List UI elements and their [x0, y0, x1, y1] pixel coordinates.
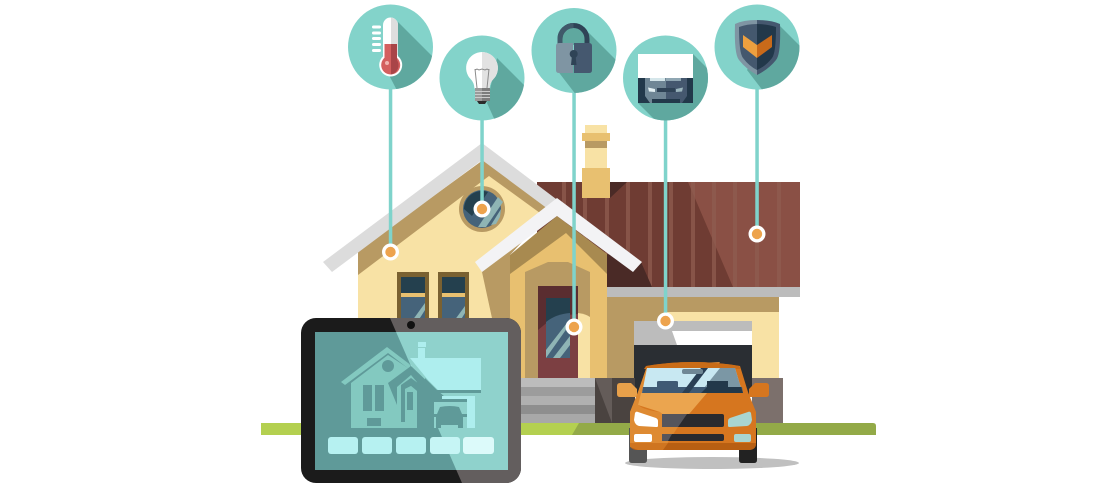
car windshield	[642, 368, 743, 393]
attic round window	[459, 186, 505, 232]
garage wing	[607, 287, 800, 395]
car	[617, 362, 769, 463]
silhouette: porch gable shading	[388, 366, 432, 428]
icon: thermometer	[348, 4, 433, 90]
tablet screen	[315, 332, 508, 470]
connector: thermometer	[382, 85, 399, 260]
foundation and steps	[521, 378, 783, 423]
car wheels	[629, 428, 757, 463]
connector: lock	[566, 88, 582, 336]
car body	[630, 362, 756, 450]
icon: shield	[714, 4, 800, 90]
silhouette: main house left	[341, 347, 417, 428]
car shadow	[625, 457, 799, 469]
ground: grass strip	[261, 423, 876, 435]
silhouette: tablet car	[432, 406, 467, 428]
car grille and lights	[634, 412, 752, 442]
silhouette: shaded side and garage	[422, 378, 445, 428]
tablet buttons	[328, 437, 494, 454]
silhouette: porch fill	[405, 386, 417, 428]
connector: light bulb	[474, 116, 490, 218]
silhouette: main house right	[410, 364, 412, 366]
front windows	[397, 272, 469, 322]
brown main roof	[537, 182, 800, 287]
tablet	[301, 318, 521, 483]
silhouette: windows and door	[363, 385, 413, 426]
car mirrors	[617, 383, 769, 397]
smart home infographic	[261, 4, 876, 483]
connector: shield	[748, 85, 766, 242]
icon: light bulb	[440, 36, 524, 120]
icon: garage	[623, 36, 708, 120]
tablet house silhouette	[341, 342, 481, 428]
connector: garage	[657, 116, 674, 330]
main roof eave	[323, 143, 560, 272]
chimney	[582, 125, 610, 198]
tablet frame	[301, 318, 521, 483]
silhouette: roof and chimney	[410, 342, 481, 390]
main house wall and gable	[323, 143, 560, 378]
front porch gable	[475, 198, 642, 378]
tablet camera	[407, 321, 415, 329]
silhouette: round attic window	[382, 360, 394, 372]
icon: padlock	[532, 8, 616, 93]
